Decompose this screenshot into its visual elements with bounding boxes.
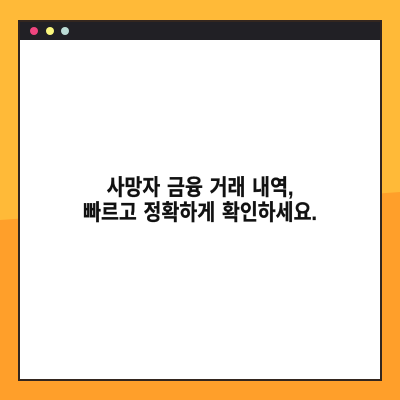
- title: 빠르고 정확하게 확인하세요.: [83, 200, 317, 225]
- icon: yellow dot: [46, 27, 54, 35]
- title bar: [20, 22, 380, 40]
- icon: pink dot: [30, 27, 38, 35]
- title: 사망자 금융 거래 내역,: [107, 174, 293, 200]
- title: [83, 174, 317, 225]
- icon: pale blue dot: [61, 27, 69, 35]
